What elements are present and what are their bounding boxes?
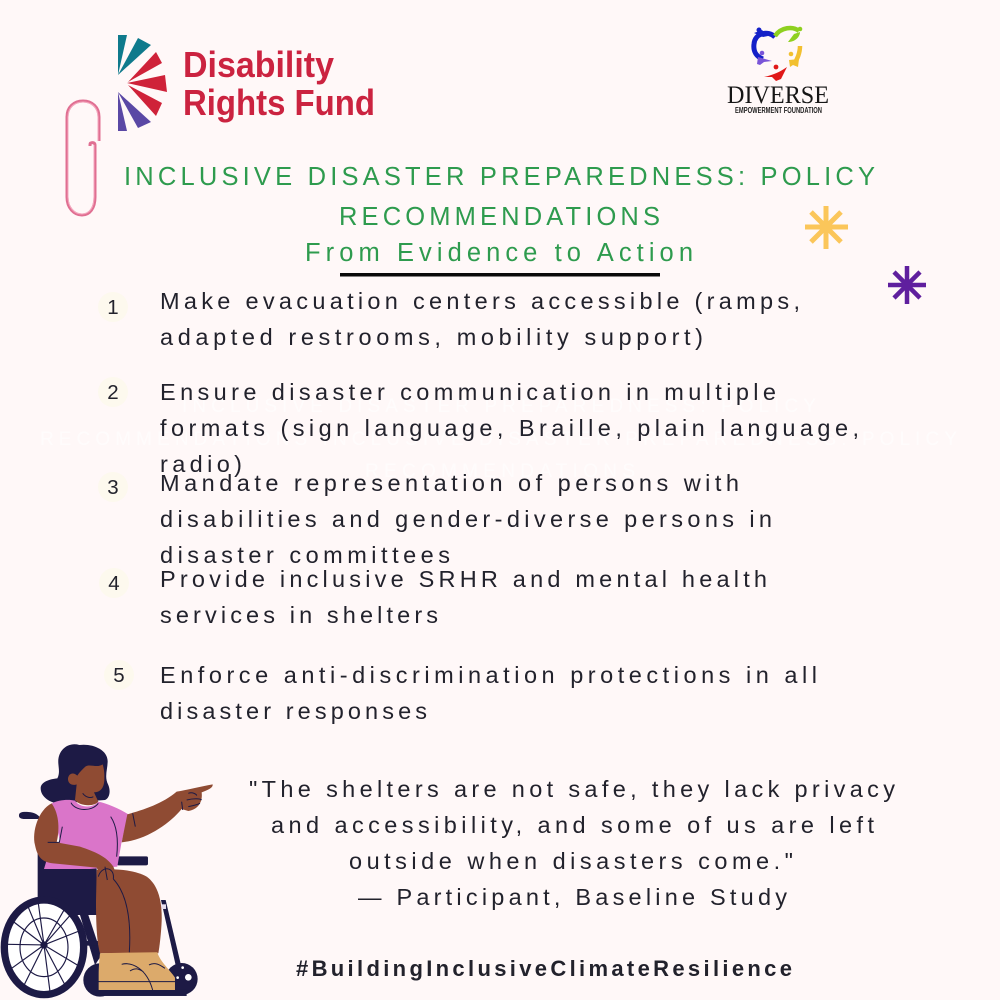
title: INCLUSIVE DISASTER PREPAREDNESS: POLICY xyxy=(124,163,875,191)
recommendation 5: 5 xyxy=(113,664,125,687)
icon: paperclip xyxy=(67,101,99,215)
recommendation 2: 2 xyxy=(107,381,119,404)
logo: Diverse Empowerment Foundation: EMPOWERMENT FOUNDATION xyxy=(735,106,822,115)
recommendation 3: disaster committees xyxy=(160,542,450,568)
recommendation 3 xyxy=(98,470,772,568)
recommendation 3: Mandate representation of persons with xyxy=(160,470,739,496)
title underline xyxy=(340,273,660,276)
recommendation 3: 3 xyxy=(107,476,119,499)
hair xyxy=(41,744,110,803)
quote: "The shelters are not safe, they lack privacy xyxy=(249,776,895,802)
title xyxy=(124,163,875,231)
legs xyxy=(96,869,162,953)
quote xyxy=(249,776,895,910)
recommendation 3: disabilities and gender-diverse persons in xyxy=(160,506,772,532)
faint background text xyxy=(40,396,957,482)
logo: Diverse Empowerment Foundation xyxy=(727,27,829,115)
quote: outside when disasters come." xyxy=(349,848,793,874)
recommendation 5 xyxy=(104,660,817,724)
recommendation 1: 1 xyxy=(107,296,119,319)
logo: Disability Rights Fund: Rights Fund xyxy=(183,82,375,123)
recommendation 4 xyxy=(99,566,767,628)
recommendation 1: Make evacuation centers accessible (ramps, xyxy=(160,288,800,314)
faint background text: RECOMMENDATIONS xyxy=(365,461,635,482)
wheelchair xyxy=(4,812,198,997)
faint background text: RECOMMENDATIONS INCLUSIVE DISASTER PREPAREDNESS: POLICY xyxy=(40,429,957,450)
pointing arm xyxy=(122,784,213,842)
icon: purple asterisk xyxy=(888,266,926,304)
recommendation 4: services in shelters xyxy=(160,602,438,628)
faint background text: INCLUSIVE DISASTER PREPAREDNESS: POLICY xyxy=(182,396,816,417)
shoes xyxy=(99,952,175,990)
recommendation 5: Enforce anti-discrimination protections in all xyxy=(160,662,817,688)
recommendation 5: disaster responses xyxy=(160,698,427,724)
recommendation 2: radio) xyxy=(160,451,242,477)
near arm xyxy=(34,803,115,880)
recommendation 1 xyxy=(98,288,800,350)
illustration: woman in wheelchair pointing xyxy=(4,744,213,997)
recommendation 4: 4 xyxy=(108,572,120,595)
title: RECOMMENDATIONS xyxy=(339,203,660,231)
icon: yellow asterisk xyxy=(805,206,848,249)
logo: Diverse Empowerment Foundation: DIVERSE xyxy=(727,82,829,109)
recommendation 2 xyxy=(98,377,859,477)
hashtag: #BuildingInclusiveClimateResilience xyxy=(296,956,792,981)
drawn details xyxy=(48,793,202,990)
recommendation 2: Ensure disaster communication in multiple xyxy=(160,379,776,405)
recommendation 2: formats (sign language, Braille, plain language, xyxy=(160,415,859,441)
quote: — Participant, Baseline Study xyxy=(358,884,787,910)
subtitle: From Evidence to Action xyxy=(305,239,693,267)
quote: and accessibility, and some of us are left xyxy=(271,812,874,838)
face and neck xyxy=(68,764,104,805)
logo: Disability Rights Fund: Disability xyxy=(183,44,334,85)
recommendation 4: Provide inclusive SRHR and mental health xyxy=(160,566,767,592)
recommendation 1: adapted restrooms, mobility support) xyxy=(160,324,703,350)
shirt xyxy=(44,800,128,869)
logo: Disability Rights Fund xyxy=(118,35,375,131)
